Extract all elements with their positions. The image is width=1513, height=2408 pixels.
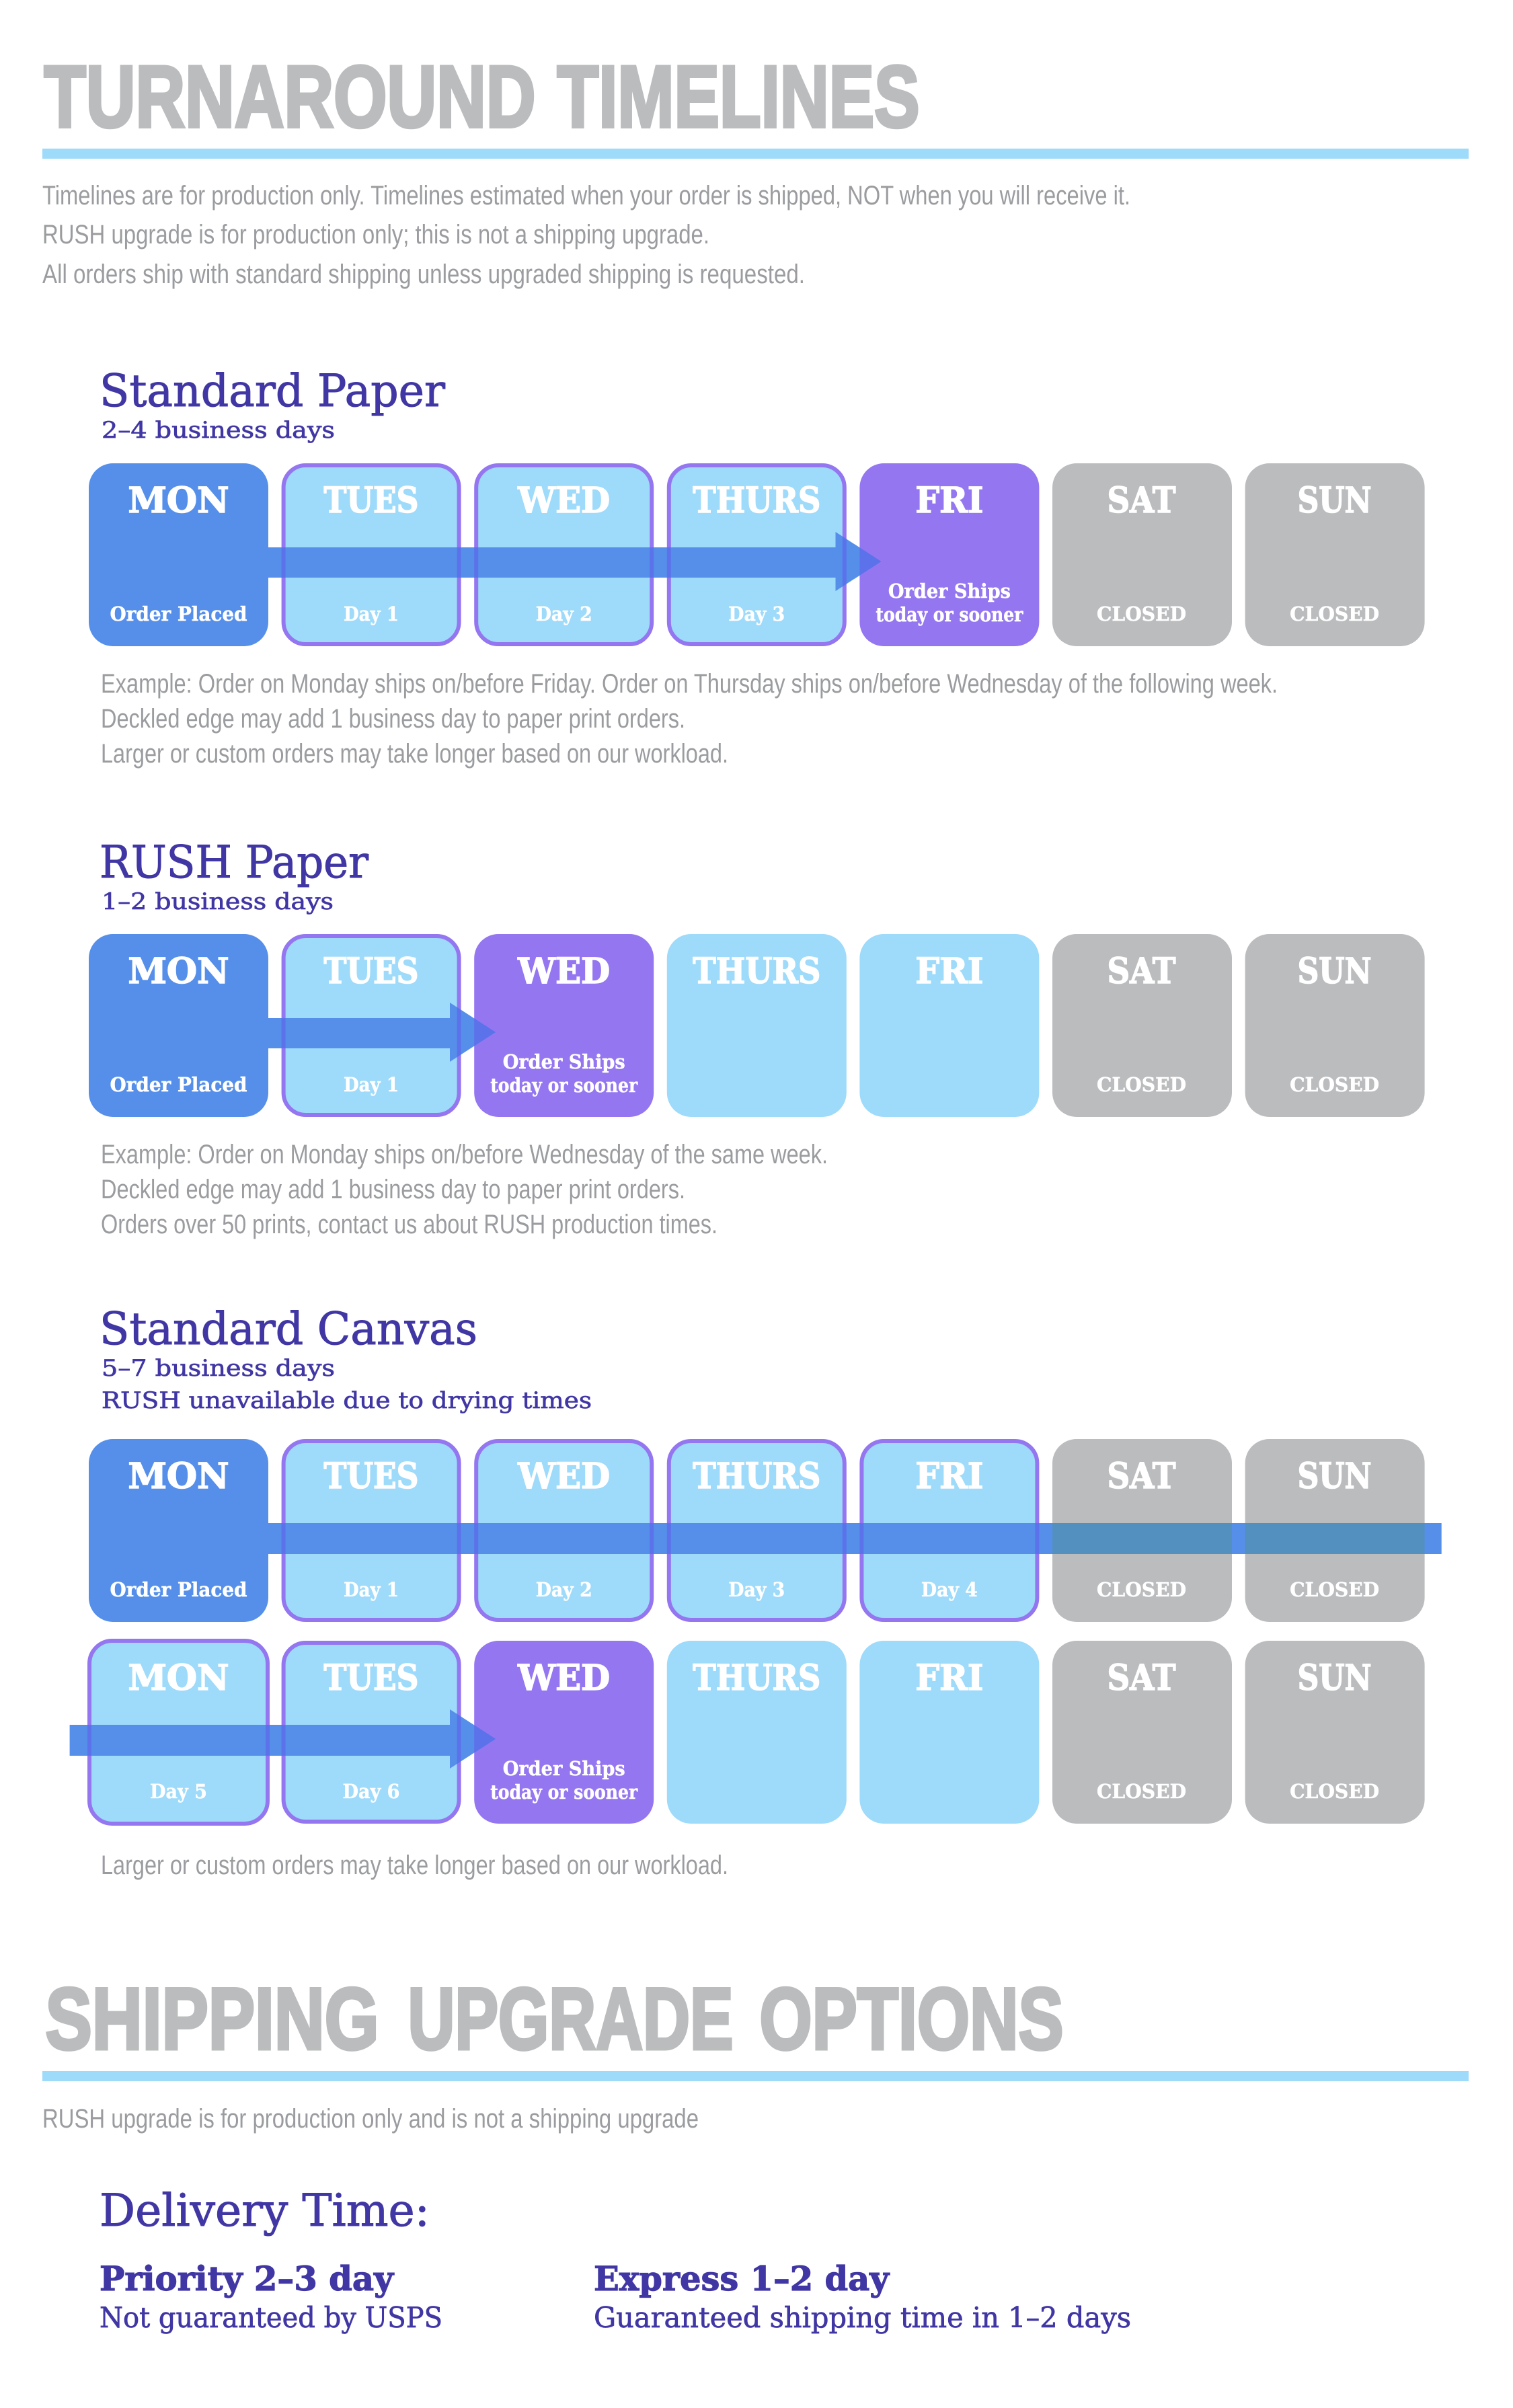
- notes: standard paper: [101, 669, 1278, 769]
- card: Monday order placed: MON: [128, 1456, 229, 1497]
- title: shipping upgrade options: [46, 1970, 1064, 2068]
- card: Saturday closed: CLOSED: [1097, 1073, 1186, 1096]
- card: Friday day 4: [861, 1441, 1037, 1620]
- card: Thursday day 3: THURS: [693, 1456, 820, 1497]
- title: turnaround timelines: TIMELINES: [557, 47, 920, 145]
- card: Friday: FRI: [915, 1658, 983, 1699]
- card: Wednesday day 2: WED: [517, 1456, 610, 1497]
- heading: standard canvas: Standard Canvas: [100, 1303, 477, 1355]
- heading rule: [42, 149, 1469, 159]
- title: turnaround timelines: TURNAROUND: [44, 47, 535, 145]
- card: Tuesday day 6: Day 6: [343, 1780, 399, 1803]
- intro text: [42, 181, 1130, 289]
- card: Tuesday day 1: Day 1: [344, 603, 399, 625]
- card: Thursday day 3: Day 3: [728, 603, 785, 625]
- title: shipping upgrade options: UPGRADE: [408, 1970, 733, 2068]
- card: Tuesday day 1: TUES: [324, 480, 418, 521]
- intro text: Timelines are for production only. Timelines estimated when your order is shipped, NOT when you will receive it.: [42, 181, 1130, 210]
- title: shipping upgrade options: SHIPPING: [46, 1970, 379, 2068]
- card: Thursday: THURS: [693, 951, 820, 992]
- heading: standard paper: [100, 365, 445, 444]
- arrow: Monday to Friday: [268, 532, 881, 591]
- card: Sunday closed: [1245, 463, 1425, 646]
- card: Saturday closed: [1052, 934, 1232, 1117]
- note: standard canvas: Larger or custom orders may take longer based on our workload.: [101, 1851, 728, 1880]
- arrow: Monday to Wednesday: [268, 1003, 496, 1062]
- card: Tuesday day 1: TUES: [324, 1456, 418, 1497]
- card: Saturday closed: [1052, 1641, 1232, 1824]
- card: Friday: FRI: [915, 951, 983, 992]
- option: priority: Priority 2–3 day: [100, 2259, 395, 2298]
- card: Wednesday day 2: Day 2: [536, 1578, 592, 1601]
- card: Monday day 5: Day 5: [150, 1780, 207, 1803]
- card: Tuesday day 6: TUES: [324, 1658, 418, 1699]
- card: Wednesday order ships: [474, 1641, 654, 1824]
- option: priority: [100, 2259, 442, 2334]
- heading: standard paper: Standard Paper: [100, 365, 445, 417]
- card: Sunday closed: CLOSED: [1290, 1578, 1379, 1601]
- card: Wednesday day 2: WED: [517, 480, 610, 521]
- option: express: Guaranteed shipping time in 1–2 days: [594, 2301, 1131, 2334]
- card: Thursday day 3: THURS: [693, 480, 820, 521]
- notes: rush paper: [101, 1140, 828, 1239]
- card: Tuesday day 1: TUES: [324, 951, 418, 992]
- notes: standard paper: Deckled edge may add 1 business day to paper print orders.: [101, 704, 685, 734]
- panel: delivery time: [100, 2185, 1131, 2334]
- heading: rush paper: 1–2 business days: [102, 888, 334, 915]
- card: Sunday closed: CLOSED: [1290, 1073, 1379, 1096]
- title: shipping upgrade options: OPTIONS: [760, 1970, 1064, 2068]
- card: Monday order placed: MON: [128, 480, 229, 521]
- card: Thursday: [667, 934, 847, 1117]
- card: Tuesday day 6: [284, 1643, 459, 1822]
- card: Tuesday day 1: [284, 465, 459, 644]
- card: Monday order placed: MON: [128, 951, 229, 992]
- card: Sunday closed: SUN: [1298, 480, 1372, 521]
- card: Wednesday order ships: WED: [517, 951, 610, 992]
- card: Thursday day 3: Day 3: [728, 1578, 785, 1601]
- card: Monday day 5: [89, 1641, 268, 1824]
- card: Friday order ships: [859, 463, 1039, 646]
- card: Saturday closed: SAT: [1107, 951, 1176, 992]
- card: Wednesday order ships: [474, 934, 654, 1117]
- card: Wednesday order ships: Order Ships: [503, 1050, 625, 1073]
- heading: standard paper: 2–4 business days: [102, 417, 335, 444]
- card: Tuesday day 1: [284, 936, 459, 1115]
- heading: standard canvas: [100, 1303, 592, 1414]
- card: Monday order placed: [89, 934, 268, 1117]
- arrow: first week continues: [268, 1523, 1442, 1554]
- heading: standard canvas: RUSH unavailable due to drying times: [102, 1387, 592, 1414]
- option: priority: Not guaranteed by USPS: [100, 2301, 442, 2334]
- card: Thursday day 3: [669, 1441, 845, 1620]
- notes: standard paper: Example: Order on Monday ships on/before Friday. Order on Thursday ships on/before Wednesday of the following week.: [101, 669, 1278, 699]
- card: Sunday closed: [1245, 934, 1425, 1117]
- card: Friday day 4: FRI: [915, 1456, 983, 1497]
- card: Wednesday order ships: Order Ships: [503, 1757, 625, 1780]
- card: Wednesday day 2: Day 2: [536, 603, 592, 625]
- shipping note: RUSH upgrade is for production only and is not a shipping upgrade: [42, 2104, 699, 2134]
- option: express: [594, 2259, 1131, 2334]
- notes: standard paper: Larger or custom orders may take longer based on our workload.: [101, 739, 728, 769]
- card: Wednesday day 2: [476, 1441, 652, 1620]
- intro text: All orders ship with standard shipping unless upgraded shipping is requested.: [42, 260, 805, 289]
- card: Friday order ships: FRI: [915, 480, 983, 521]
- card: Monday order placed: Order Placed: [110, 1073, 247, 1096]
- card: Thursday: THURS: [693, 1658, 820, 1699]
- arrow: second week to Wednesday: [70, 1709, 496, 1769]
- card: Saturday closed: [1052, 463, 1232, 646]
- card: Sunday closed: CLOSED: [1290, 603, 1379, 625]
- card: Saturday closed: [1052, 1439, 1232, 1622]
- card: Friday order ships: Order Ships: [888, 580, 1011, 603]
- card: Friday day 4: Day 4: [921, 1578, 978, 1601]
- option: express: Express 1–2 day: [594, 2259, 890, 2298]
- card: Tuesday day 1: Day 1: [344, 1578, 399, 1601]
- card: Saturday closed: CLOSED: [1097, 1780, 1186, 1803]
- card: Saturday closed: CLOSED: [1097, 603, 1186, 625]
- heading rule: [42, 2071, 1469, 2081]
- card: Wednesday order ships: today or sooner: [490, 1074, 638, 1097]
- card: Monday order placed: Order Placed: [110, 603, 247, 625]
- card: Sunday closed: SUN: [1298, 1456, 1372, 1497]
- panel: rush paper: [89, 837, 1425, 1239]
- heading: rush paper: [100, 837, 368, 915]
- card: Friday: [859, 1641, 1039, 1824]
- heading: rush paper: RUSH Paper: [100, 837, 368, 888]
- card: Thursday day 3: [669, 465, 845, 644]
- card: Friday: [859, 934, 1039, 1117]
- card: Saturday closed: SAT: [1107, 480, 1176, 521]
- panel: standard canvas: [70, 1303, 1442, 1880]
- card: Sunday closed: SUN: [1298, 951, 1372, 992]
- card: Tuesday day 1: [284, 1441, 459, 1620]
- card: Saturday closed: SAT: [1107, 1658, 1176, 1699]
- card: Monday day 5: MON: [128, 1658, 229, 1699]
- heading: delivery time: Delivery Time:: [100, 2185, 430, 2237]
- notes: rush paper: Example: Order on Monday ships on/before Wednesday of the same week.: [101, 1140, 828, 1169]
- card: Friday order ships: today or sooner: [876, 603, 1023, 626]
- card: Thursday: [667, 1641, 847, 1824]
- card: Sunday closed: SUN: [1298, 1658, 1372, 1699]
- card: Sunday closed: [1245, 1439, 1425, 1622]
- notes: rush paper: Deckled edge may add 1 business day to paper print orders.: [101, 1175, 685, 1204]
- card: Monday order placed: [89, 1439, 268, 1622]
- card: Sunday closed: CLOSED: [1290, 1780, 1379, 1803]
- card: Saturday closed: SAT: [1107, 1456, 1176, 1497]
- intro text: RUSH upgrade is for production only; this is not a shipping upgrade.: [42, 220, 709, 249]
- card: Saturday closed: CLOSED: [1097, 1578, 1186, 1601]
- card: Monday order placed: Order Placed: [110, 1578, 247, 1601]
- card: Wednesday order ships: today or sooner: [490, 1781, 638, 1803]
- card: Wednesday order ships: WED: [517, 1658, 610, 1699]
- heading: standard canvas: 5–7 business days: [102, 1355, 335, 1382]
- panel: standard paper: [89, 365, 1425, 769]
- card: Wednesday day 2: [476, 465, 652, 644]
- card: Monday order placed: [89, 463, 268, 646]
- card: Sunday closed: [1245, 1641, 1425, 1824]
- card: Tuesday day 1: Day 1: [344, 1073, 399, 1096]
- notes: rush paper: Orders over 50 prints, contact us about RUSH production times.: [101, 1210, 717, 1239]
